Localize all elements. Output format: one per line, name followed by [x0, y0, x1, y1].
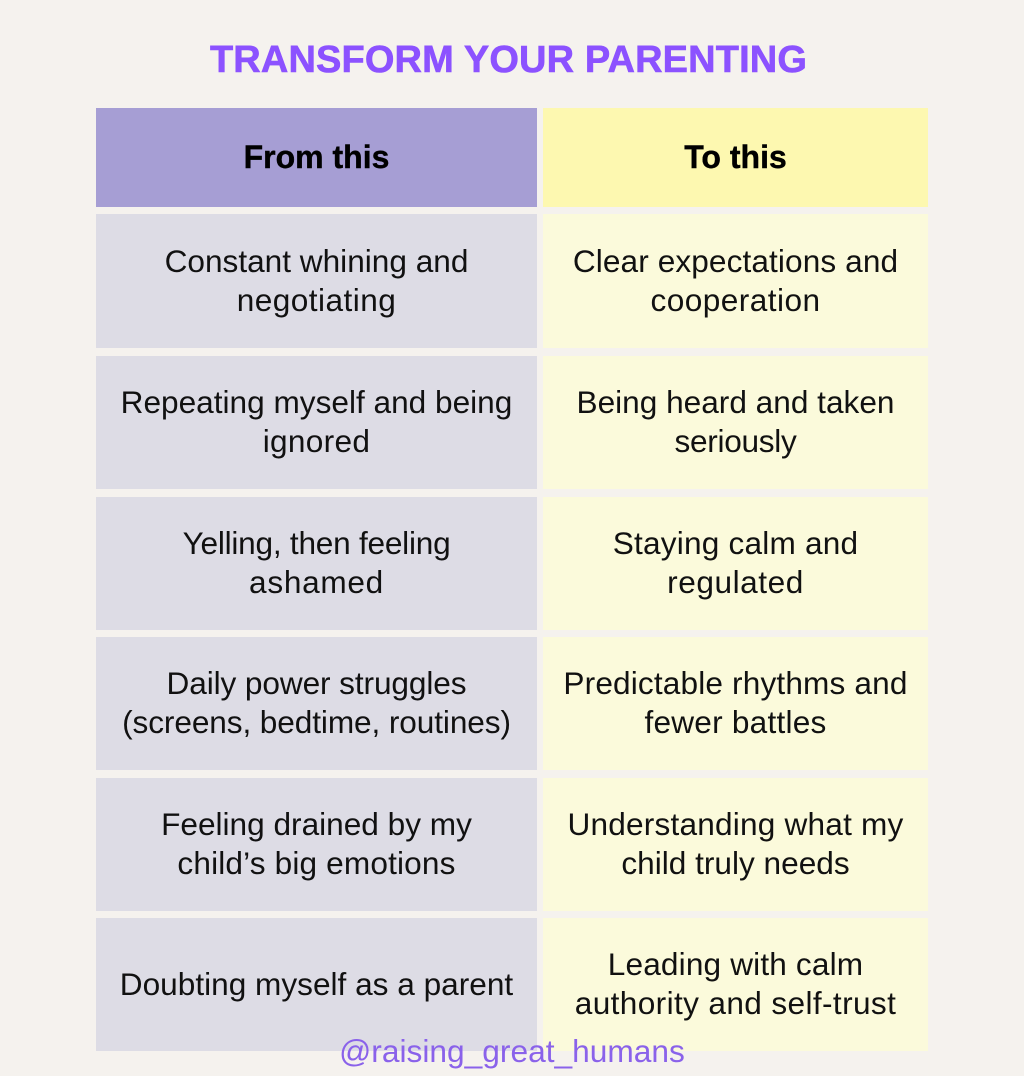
row 1 to — [543, 214, 928, 348]
row 4 from — [96, 637, 537, 770]
handle: @raising_great_humans — [339, 1033, 685, 1069]
row 4 to: Predictable rhythms and — [563, 665, 908, 701]
header: To this — [543, 108, 928, 207]
row 1 from: negotiating — [237, 282, 396, 318]
header: To this: To this — [684, 139, 787, 175]
row 5 to — [543, 778, 928, 911]
row 4 from: Daily power struggles — [167, 665, 466, 701]
header: From this: From this — [244, 139, 389, 175]
row 1 to: cooperation — [650, 282, 821, 318]
row 5 from — [96, 778, 537, 911]
row 1 from: Constant whining and — [165, 242, 468, 278]
row 3 from: ashamed — [249, 564, 384, 600]
row 3 to: regulated — [667, 564, 804, 600]
row 3 to — [543, 497, 928, 630]
row 2 from: Repeating myself and being — [121, 384, 512, 420]
row 5 from: Feeling drained by my — [161, 806, 472, 842]
header: From this — [96, 108, 537, 207]
row 6 to — [543, 918, 928, 1051]
row 4 from: (screens, bedtime, routines) — [122, 704, 511, 740]
row 2 from: ignored — [263, 423, 370, 459]
row 3 from — [96, 497, 537, 630]
row 2 to: Being heard and taken — [577, 384, 894, 420]
row 5 to: child truly needs — [621, 845, 850, 881]
row 6 from — [96, 918, 537, 1051]
row 4 to — [543, 637, 928, 770]
row 1 to: Clear expectations and — [573, 242, 898, 278]
row 5 from: child’s big emotions — [177, 845, 456, 881]
row 6 from: Doubting myself as a parent — [120, 966, 513, 1002]
row 6 to: authority and self-trust — [575, 985, 896, 1021]
row 4 to: fewer battles — [644, 704, 827, 740]
row 6 to: Leading with calm — [608, 946, 863, 982]
row 2 from — [96, 356, 537, 489]
row 5 to: Understanding what my — [567, 806, 904, 842]
row 2 to: seriously — [674, 423, 796, 459]
comparison table — [96, 108, 928, 1051]
row 2 to — [543, 356, 928, 489]
row 1 from — [96, 214, 537, 348]
row 3 from: Yelling, then feeling — [183, 525, 450, 561]
title: TRANSFORM YOUR PARENTING — [210, 39, 807, 81]
row 3 to: Staying calm and — [613, 525, 858, 561]
